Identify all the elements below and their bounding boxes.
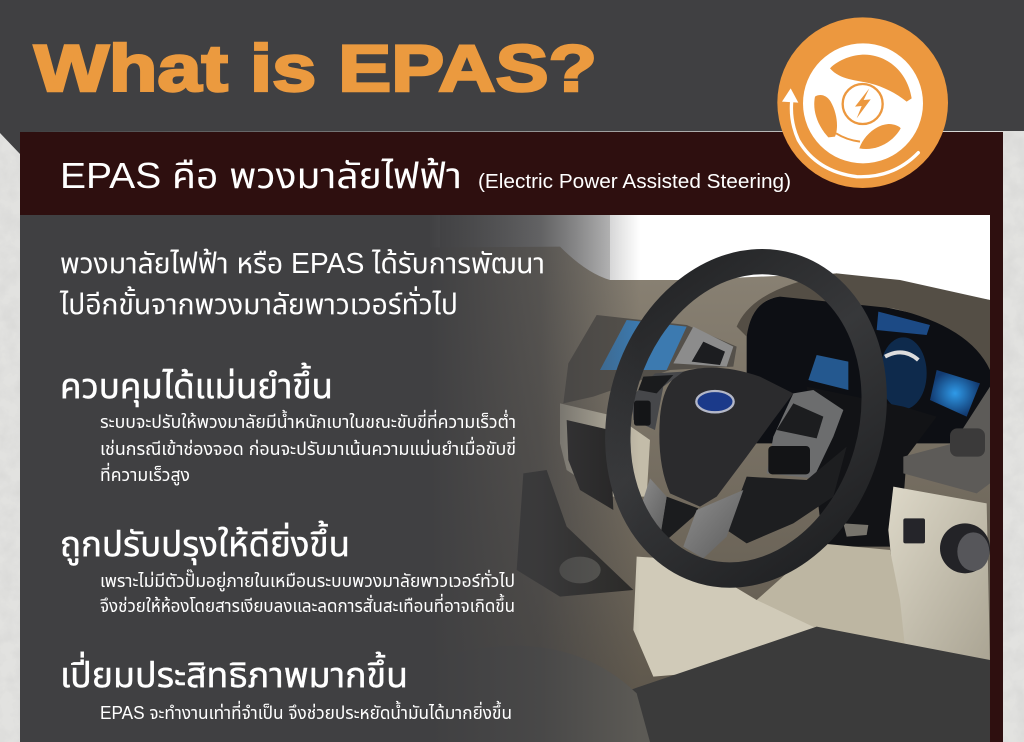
- text block: intro: พวงมาลัยไฟฟ้า หรือ EPAS ได้รับการพัฒนา: [60, 248, 545, 280]
- left controls: [632, 372, 683, 430]
- heading: EPAS definition: [60, 155, 791, 196]
- cluster screens: [877, 312, 930, 335]
- panel: dashboard photo: [20, 215, 990, 742]
- icon: electric steering wheel: [777, 17, 948, 188]
- heading: EPAS definition: (Electric Power Assisted Steering): [478, 171, 791, 193]
- header band: [0, 0, 1024, 154]
- Ford badge: [696, 391, 734, 412]
- title: What is EPAS?: [34, 31, 597, 105]
- text block: more precise control: [60, 362, 516, 487]
- heading: EPAS definition: EPAS คือ พวงมาลัยไฟฟ้า: [60, 155, 462, 196]
- steering wheel: [582, 231, 910, 606]
- cluster hood: [737, 273, 990, 370]
- key: [843, 523, 868, 537]
- instrument cluster recess: [747, 295, 990, 443]
- dashboard body: [20, 247, 990, 742]
- text block: more precise control: ควบคุมได้แม่นยำขึ้น: [60, 362, 333, 407]
- chrome spokes: [637, 478, 667, 538]
- right controls: [767, 390, 843, 478]
- text block: more precise control: เช่นกรณีเข้าช่องจอด ก่อนจะปรับมาเน้นความแม่นยำเมื่อขับขี่: [100, 436, 516, 459]
- text block: more precise control: ระบบจะปรับให้พวงมาลัยมีน้ำหนักเบาในขณะขับขี่ที่ความเร็วต่ำ: [100, 409, 516, 432]
- text block: more precise control: ที่ความเร็วสูง: [100, 462, 190, 487]
- text block: improved: เพราะไม่มีตัวปั๊มอยู่ภายในเหมือนระบบพวงมาลัยพาวเวอร์ทั่วไป: [100, 569, 515, 593]
- text block: more efficient: เปี่ยมประสิทธิภาพมากขึ้น: [60, 651, 408, 695]
- dark void right of wheel: [807, 387, 937, 547]
- right console: [903, 387, 990, 493]
- text block: intro: [59, 248, 545, 321]
- gear console: [517, 470, 633, 597]
- lower hub: [727, 447, 847, 543]
- text block: improved: จึงช่วยให้ห้องโดยสารเงียบลงและลดการสั่นสะเทือนที่อาจเกิดขึ้น: [100, 593, 515, 616]
- text block: improved: [60, 520, 515, 616]
- floor: [630, 627, 990, 742]
- overlay: left text backdrop: [20, 215, 640, 742]
- wheel hub: [659, 368, 793, 507]
- door beige: [888, 487, 990, 663]
- text block: more efficient: EPAS จะทำงานเท่าที่จำเป็น จึงช่วยประหยัดน้ำมันได้มากยิ่งขึ้น: [100, 700, 512, 723]
- panel: maroon frame: [20, 132, 1003, 742]
- text block: improved: ถูกปรับปรุงให้ดียิ่งขึ้น: [60, 520, 350, 565]
- text block: more efficient: [60, 651, 512, 723]
- radio panel: [560, 403, 650, 497]
- text block: intro: ไปอีกขั้นจากพวงมาลัยพาวเวอร์ทั่วไป: [59, 286, 458, 321]
- centre stack: [563, 315, 737, 403]
- wheel rim: [582, 231, 910, 606]
